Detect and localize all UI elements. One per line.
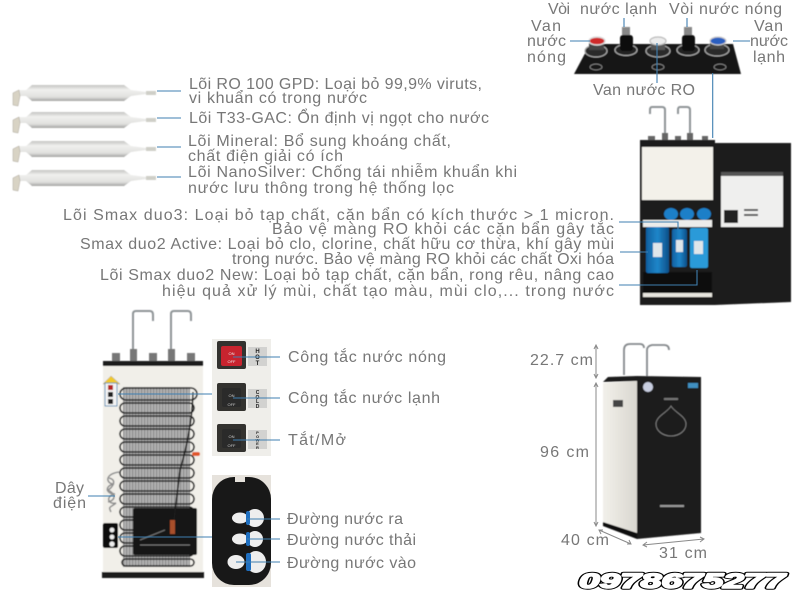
callout lines: rear view [88, 357, 280, 562]
callout lines: top valves [570, 18, 750, 138]
text block: Smax filter descriptions: Bảo vệ màng RO khỏi các cặn bẩn gây tắc [272, 219, 614, 238]
labels: top valves: Vòi nước nóng [669, 1, 782, 18]
power switch: ON [228, 434, 235, 439]
filter Smax duo3 [672, 229, 687, 267]
rear body [103, 362, 203, 578]
labels: rear view: Công tắc nước lạnh [288, 388, 440, 407]
top cap [603, 376, 701, 382]
labels: top valves [527, 1, 788, 99]
phone number [579, 570, 787, 593]
labels: rear view: Đường nước thải [287, 532, 416, 549]
cold water valve knob [705, 37, 729, 56]
labels: rear view [53, 347, 446, 572]
port: inlet [228, 551, 266, 573]
cold switch: L [256, 399, 259, 405]
text block: cartridge descriptions [188, 76, 517, 197]
orange tag [192, 452, 200, 456]
valve stubs [648, 133, 708, 140]
water port mini box [103, 523, 118, 548]
phone number: 0978675277 [579, 570, 787, 593]
power switch: OFF [228, 443, 236, 448]
hot switch: OFF [228, 359, 236, 364]
power switch: R [256, 445, 259, 450]
labels: dimensions [530, 352, 707, 562]
blue caps [664, 208, 711, 220]
cartridge T33 [13, 112, 156, 133]
shelf [643, 220, 712, 227]
gauge [643, 382, 653, 392]
text block: cartridge descriptions: nước lưu thông trong hệ thống lọc [188, 180, 454, 197]
hot switch [217, 341, 267, 369]
dimension arrows [594, 345, 704, 547]
RO valve knob [646, 37, 670, 57]
labels: dimensions: 96 cm [540, 444, 589, 461]
labels: top valves: nóng [527, 49, 566, 66]
power switch: O [256, 434, 259, 439]
labels: dimensions: 31 cm [659, 545, 707, 562]
text block: Smax filter descriptions: Lõi Smax duo3: Loại bỏ tạp chất, cặn bẩn có kích thước > 1 micron. [63, 206, 614, 224]
labels: top valves: Van [531, 18, 561, 35]
hot switch: T [256, 361, 260, 367]
text block: cartridge descriptions: chất điện giải có ích [188, 148, 343, 165]
cold switch [217, 383, 267, 411]
text block: Smax filter descriptions [63, 206, 614, 300]
control plate [574, 44, 741, 74]
panel: top faucet and valve plate [574, 27, 741, 74]
labels: rear view: Tắt/Mở [288, 430, 346, 449]
text block: cartridge descriptions: Lõi RO 100 GPD: Loại bỏ 99,9% viruts, [189, 76, 482, 93]
filter Smax duo2 Active [646, 227, 669, 273]
blue tag [688, 383, 698, 388]
black front [637, 378, 701, 539]
compressor box [133, 508, 197, 555]
cabinet body [640, 140, 715, 305]
hot water valve knob [585, 37, 607, 57]
power wire up coil [174, 392, 193, 520]
panel: dimensioned unit [603, 344, 701, 539]
panel: water port close-up [212, 475, 271, 587]
labels: dimensions: 22.7 cm [530, 352, 593, 369]
mini switches [105, 383, 117, 406]
power switch: E [256, 441, 259, 446]
callout lines: cartridges [157, 91, 181, 177]
faucets [624, 344, 669, 377]
cold switch: C [256, 390, 260, 396]
cartridge NanoSilver [13, 170, 156, 191]
port: outlet [232, 509, 264, 527]
power switch: W [256, 438, 260, 442]
warning triangle [103, 376, 120, 384]
labels: rear view: Đường nước ra [287, 511, 403, 528]
door label sheet [721, 172, 783, 227]
interior bottom [643, 272, 712, 293]
labels: rear view: Đường nước vào [287, 555, 416, 572]
power switch: P [256, 430, 259, 435]
panel: switch close-ups [212, 339, 271, 456]
white side panel [603, 381, 637, 533]
text block: cartridge descriptions: Lõi Mineral: Bổ sung khoáng chất, [188, 132, 451, 150]
condenser coil [120, 388, 197, 566]
power switch [217, 424, 267, 452]
hot switch: O [255, 355, 260, 361]
text block: cartridge descriptions: Lõi NanoSilver: Chống tái nhiễm khuẩn khi [188, 162, 517, 181]
text block: Smax filter descriptions: trong nước. Bảo vệ màng RO khỏi các chất Oxi hóa [232, 251, 614, 268]
cold tap knob [615, 27, 637, 56]
text block: cartridge descriptions: Lõi T33-GAC: Ổn định vị ngọt cho nước [189, 108, 489, 127]
text block: Smax filter descriptions: Smax duo2 Active: Loại bỏ clo, clorine, chất hữu cơ thừa, khí gây mùi [80, 236, 614, 253]
cartridge RO [13, 85, 156, 106]
phone number: 0978675277 [579, 570, 787, 593]
port: drain [232, 531, 263, 547]
labels: rear view: Công tắc nước nóng [288, 347, 446, 366]
labels: top valves: nước [527, 33, 566, 50]
labels: top valves: Van nước RO [593, 82, 695, 99]
text block: Smax filter descriptions: hiệu quả xử lý mùi, chất tạo màu, mùi clo,... trong nước [162, 283, 614, 300]
cold switch: O [256, 395, 260, 401]
door [715, 143, 791, 305]
panel: rear view of unit [102, 311, 204, 578]
callout lines: filters [619, 222, 697, 285]
base [603, 522, 637, 539]
power cord [107, 472, 119, 512]
upper white panel [642, 147, 713, 200]
cold switch: OFF [228, 402, 236, 407]
hot switch: ON [228, 351, 235, 356]
panel: open unit with filters [640, 107, 791, 305]
text block: cartridge descriptions: vi khuẩn có trong nước [189, 89, 367, 107]
filter Smax duo2 New [690, 228, 708, 268]
handle [613, 400, 623, 407]
labels: top valves: nước [750, 33, 788, 50]
labels: top valves: Vòi [548, 1, 570, 18]
faucets [650, 107, 690, 136]
faucets [112, 311, 195, 362]
labels: top valves: nước lạnh [580, 1, 657, 18]
condenser fins [123, 387, 190, 567]
cartridge Mineral [13, 141, 156, 162]
text block: Smax filter descriptions: Lõi Smax duo2 New: Loại bỏ tạp chất, cặn bẩn, rong rêu, nâng cao [100, 266, 614, 284]
labels: rear view: Dây [55, 480, 84, 497]
hot tap knob [677, 27, 699, 56]
drop logo [656, 406, 686, 436]
labels: top valves: Van [754, 18, 783, 35]
cold switch: ON [228, 393, 235, 398]
labels: top valves: lạnh [753, 49, 785, 66]
labels: rear view: điện [53, 495, 86, 512]
hot switch: H [255, 349, 260, 355]
labels: dimensions: 40 cm [561, 532, 609, 549]
panel: cartridges [13, 85, 156, 191]
cold switch: D [256, 404, 260, 410]
